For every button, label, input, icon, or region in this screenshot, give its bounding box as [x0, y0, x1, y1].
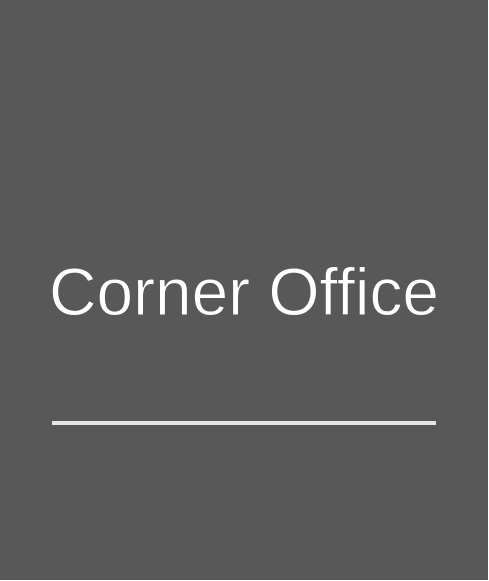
- underline rule: [52, 421, 436, 425]
- title: Corner Office: [49, 255, 439, 330]
